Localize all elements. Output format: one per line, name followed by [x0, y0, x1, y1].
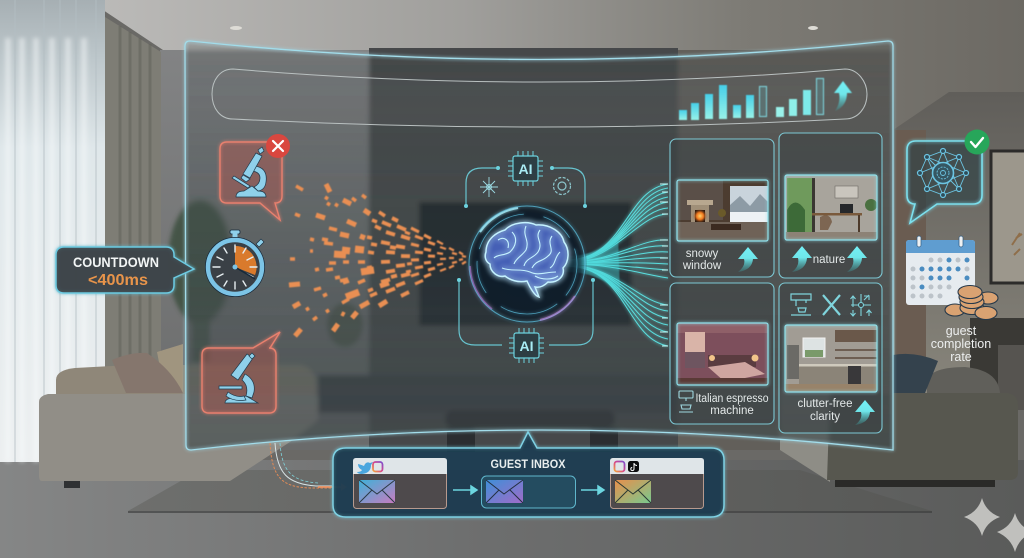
- photo: pink bedroom: [677, 323, 768, 385]
- media console: [318, 375, 678, 413]
- icon: up arrow: [855, 400, 875, 425]
- latency text: <400ms: [88, 272, 148, 289]
- icon: microscope: [219, 353, 258, 403]
- heading: GUEST INBOX: [490, 457, 566, 471]
- icon: microscope: [232, 147, 266, 197]
- envelope: [359, 480, 395, 503]
- arrow: orange feed into guest inbox: [270, 443, 347, 491]
- icon: glowing brain: [485, 223, 568, 297]
- photo: fireplace room with snowy window: [677, 180, 768, 241]
- callout: rejected microscope: [220, 134, 290, 220]
- grey drape: [105, 17, 161, 370]
- icon: bottom AI chip: AI: [520, 338, 534, 354]
- icon: gear: [554, 178, 570, 194]
- television: [419, 202, 632, 326]
- right sofa: [780, 354, 1018, 487]
- icon: coffee machine: [791, 294, 811, 315]
- floor: [0, 460, 1024, 558]
- icon: neural network: [918, 148, 968, 198]
- far wall: [893, 92, 1024, 410]
- label: guest completion rate: guest: [946, 324, 977, 338]
- icon: camera app: [373, 462, 382, 472]
- top analytics bar: [212, 69, 867, 127]
- label: guest completion rate: completion: [931, 337, 991, 351]
- message card: third: [610, 458, 704, 508]
- dark alcove: [970, 318, 1024, 410]
- countdown text: COUNTDOWN: [73, 254, 159, 270]
- icon: espresso machine: [679, 391, 693, 412]
- icon: up arrow: [792, 246, 812, 272]
- arrow: [453, 486, 477, 494]
- result cards: [670, 133, 882, 433]
- card: snowy window: window: [682, 260, 722, 272]
- callout: second microscope: [202, 332, 280, 413]
- icon: spark node: [480, 177, 498, 197]
- small plant: [327, 303, 363, 347]
- coffee table: [445, 410, 618, 452]
- circuit brackets: [459, 168, 593, 345]
- panel: guest inbox: [333, 432, 724, 517]
- photo: kitchen: [785, 325, 877, 392]
- arrow: [581, 486, 604, 494]
- sheer curtain: [0, 0, 105, 462]
- glow disc: [467, 204, 587, 324]
- icon: corner sparkle mark: [964, 498, 1024, 552]
- icon: crossed tools: [823, 295, 840, 315]
- icon: stopwatch: [205, 230, 265, 297]
- icon: bird: [357, 462, 373, 474]
- stream end ticks: [660, 184, 668, 346]
- bar chart: [679, 78, 824, 120]
- message card: second: [482, 476, 576, 508]
- icon: up arrow: [847, 246, 867, 272]
- centre wall: [369, 48, 678, 448]
- label: nature: [813, 254, 845, 266]
- rug: [128, 470, 932, 512]
- callout: approved network: [907, 130, 990, 223]
- recessed lights: [230, 26, 818, 30]
- icon: coin stack: [945, 286, 998, 320]
- label: Italian espresso: [696, 393, 768, 405]
- wall picture: [991, 151, 1024, 283]
- rings: [469, 206, 585, 322]
- icon: camera app: [614, 462, 624, 472]
- data particle stream (orange fragments): [289, 184, 466, 336]
- holographic panel: [185, 41, 893, 450]
- icon: up arrow: [738, 247, 758, 272]
- message card: first: [353, 458, 447, 508]
- label: clutter-free: [798, 398, 852, 410]
- icon: calendar: [906, 236, 975, 305]
- ceiling: [88, 0, 1024, 130]
- card: Italian espresso machine: [670, 283, 774, 424]
- icon: top AI chip: [508, 151, 543, 186]
- card: clutter-free clarity: [779, 283, 882, 433]
- label: snowy: [686, 248, 719, 260]
- frosted blur of room through panel: [186, 48, 836, 441]
- right rear wall: [678, 50, 894, 450]
- envelope: [486, 480, 523, 503]
- icon: sort arrows: [850, 294, 872, 316]
- teal stream core: [566, 236, 620, 292]
- card: nature: [779, 133, 882, 278]
- card: Italian espresso machine: machine: [710, 405, 754, 417]
- callout: countdown label: [56, 247, 194, 293]
- icon: top AI chip: AI: [518, 161, 532, 177]
- photo: desk with garden view: [785, 175, 877, 240]
- AI core: brain and circuit brackets: [457, 151, 595, 363]
- label: guest completion rate: [931, 324, 991, 364]
- icon: up arrow: [834, 81, 852, 111]
- label: guest completion rate: rate: [950, 350, 972, 364]
- doorway: [895, 130, 926, 370]
- envelope: [615, 480, 651, 503]
- left wall: [160, 50, 370, 450]
- sideboard: [780, 390, 830, 482]
- icon: red cross badge: [266, 134, 290, 158]
- card: clutter-free clarity: clarity: [810, 411, 840, 423]
- card: snowy window: [670, 139, 774, 277]
- left sofa: [39, 344, 318, 488]
- icon: bottom AI chip: [509, 328, 544, 363]
- icon: music app: [628, 461, 639, 472]
- icon: green check badge: [964, 130, 990, 154]
- bar outline: [212, 69, 867, 127]
- plant: [168, 200, 232, 362]
- teal data streams: [566, 184, 668, 346]
